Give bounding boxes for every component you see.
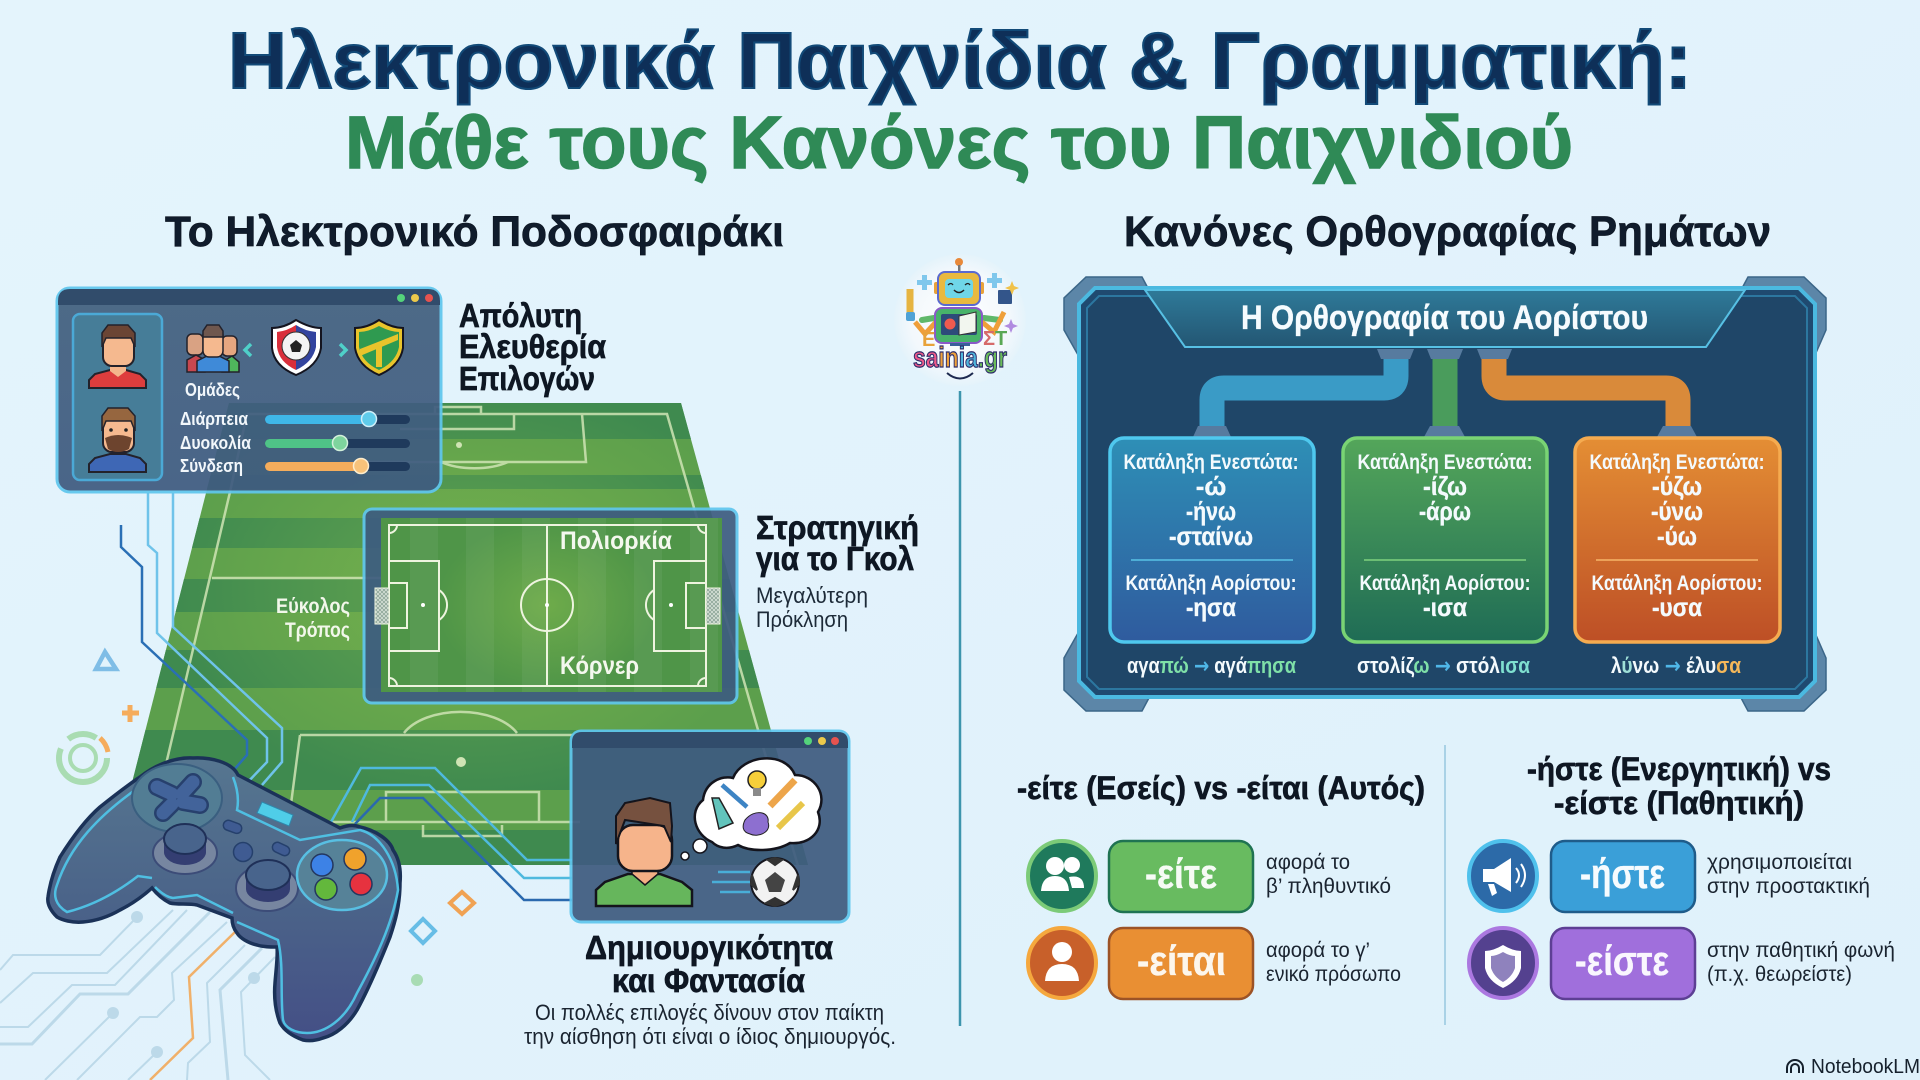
description: [1707, 939, 1895, 986]
crayon icon: [778, 803, 803, 828]
window dots: [804, 737, 839, 745]
action buttons: [297, 840, 387, 910]
text: strategy for goal: για το Γκολ: [756, 540, 914, 577]
text: strategy for goal: [756, 509, 919, 632]
logo letters: Τ: [995, 328, 1007, 350]
title: Μάθε τους Κανόνες του Παιχνιδιού: [345, 101, 1573, 184]
icon: group: [1028, 841, 1096, 911]
rule row: eite: [1028, 841, 1391, 912]
lower divider: [1444, 745, 1446, 1025]
pipe connectors: [1193, 349, 1697, 437]
logo letters: Ε: [922, 329, 935, 351]
title: Ηλεκτρονικά Παιχνίδια & Γραμματική:: [228, 16, 1692, 105]
card: green: Κατάληξη Αορίστου:: [1360, 572, 1530, 595]
slider: pass accuracy: [180, 409, 410, 429]
pencil icon: [770, 780, 795, 806]
flask icon: [712, 798, 733, 829]
icon: shield: [1469, 928, 1537, 998]
label: corner: Κόρνερ: [560, 652, 639, 680]
label: easy way: Τρόπος: [285, 619, 350, 642]
decorative shapes: [59, 652, 474, 986]
description: στην παθητική φωνή: [1707, 939, 1895, 962]
text: absolute freedom of choice: Απόλυτη: [459, 297, 582, 334]
window dots: [397, 294, 433, 302]
goal nets: [375, 588, 720, 624]
examples: στολίζω → στόλισα: [1357, 653, 1530, 679]
small controller buttons: [222, 819, 291, 862]
description: στην προστακτική: [1707, 875, 1870, 898]
controller trim: [55, 777, 398, 1033]
logo wordmark: sainia.gr: [913, 342, 1007, 374]
heading: iste vs eiste: [1527, 751, 1831, 821]
d-pad: [132, 764, 222, 832]
text: absolute freedom of choice: Επιλογών: [459, 360, 595, 397]
football field in perspective: [132, 403, 808, 865]
card: green: -άρω: [1419, 496, 1471, 526]
card: orange: -υσα: [1652, 592, 1702, 622]
label: easy way: [276, 595, 350, 642]
heading: electronic football: Το Ηλεκτρονικό Ποδοσφαιράκι: [165, 208, 784, 256]
title: [228, 16, 1692, 184]
heading: verb spelling rules: Κανόνες Ορθογραφίας Ρημάτων: [1124, 208, 1771, 256]
speed lines: [712, 872, 750, 892]
description: ενικό πρόσωπο: [1266, 963, 1401, 986]
card: orange: -ύνω: [1651, 496, 1703, 526]
panel: creativity window: [571, 731, 849, 922]
examples: λύνω → έλυσα: [1611, 653, 1741, 679]
text: creativity and imagination: Δημιουργικότητα: [585, 929, 833, 966]
pill: -ήστε: [1580, 850, 1665, 897]
description: (π.χ. θεωρείστε): [1707, 963, 1852, 986]
circuit lines: left decorations: [121, 493, 572, 900]
panel: team selection UI: [57, 288, 441, 492]
game controller: [48, 758, 400, 1041]
icon: person: [1028, 928, 1096, 998]
pill: [1109, 841, 1253, 912]
pill: [1109, 928, 1253, 999]
card: green: [1343, 438, 1547, 642]
card: blue: -σταίνω: [1169, 521, 1253, 551]
pitch markings: [389, 525, 706, 686]
text: creativity and imagination: [524, 929, 896, 1049]
chevron left: [245, 344, 251, 356]
slider: difficulty: Δυοκολία: [180, 433, 251, 453]
bulb icon: [748, 771, 766, 796]
heading: iste vs eiste: -ήστε (Ενεργητική) vs: [1527, 751, 1831, 787]
description: αφορά το γ’: [1266, 939, 1370, 962]
card: orange: [1575, 438, 1780, 642]
description: αφορά το: [1266, 851, 1350, 874]
heading: iste vs eiste: -είστε (Παθητική): [1554, 785, 1804, 821]
connector pipes: [1212, 355, 1678, 428]
card: blue: -ησα: [1186, 592, 1236, 622]
card: blue: Κατάληξη Ενεστώτα:: [1124, 451, 1298, 474]
panel: aorist spelling: [1064, 277, 1826, 711]
description: [1707, 851, 1870, 898]
label: siege: Πολιορκία: [560, 527, 673, 555]
heading: eite vs eitai: -είτε (Εσείς) vs -είται (Αυτός): [1017, 770, 1425, 806]
card: orange: Κατάληξη Αορίστου:: [1592, 572, 1762, 595]
palette icon: [743, 813, 769, 835]
card: orange: -ύω: [1657, 521, 1697, 551]
examples: αγαπώ → αγάπησα: [1127, 653, 1296, 679]
examples: [1127, 653, 1741, 679]
football: [751, 858, 799, 906]
text: absolute freedom of choice: Ελευθερία: [459, 328, 606, 365]
panel: strategy pitch: [364, 509, 737, 703]
card: blue: Κατάληξη Αορίστου:: [1126, 572, 1296, 595]
pixel avatar: [596, 798, 692, 906]
rule row: iste: [1469, 841, 1870, 912]
panel header: [1145, 290, 1745, 347]
circuit traces under controller: [0, 910, 275, 1080]
slider: connection: Σύνδεση: [180, 456, 243, 476]
pill: [1551, 928, 1695, 999]
pill: -είτε: [1145, 850, 1217, 897]
slider: pass accuracy: Διάρπεια: [180, 409, 248, 429]
rule row: eitai: [1028, 928, 1401, 999]
thought bubble: [681, 758, 821, 860]
description: χρησιμοποιείται: [1707, 851, 1852, 874]
teams icon: [187, 325, 239, 372]
slider: difficulty: [180, 433, 410, 453]
left thumbstick: [153, 824, 217, 874]
text: absolute freedom of choice: [459, 297, 606, 397]
frame corners: [1064, 277, 1826, 711]
card: blue: [1110, 438, 1314, 642]
label: teams: Ομάδες: [185, 380, 240, 400]
logo: sainia.gr robot: [894, 254, 1026, 386]
logo letters: [922, 328, 1007, 351]
panel header: Η Ορθογραφία του Αορίστου: [1241, 299, 1648, 337]
right thumbstick: [236, 860, 298, 911]
chevron right: [340, 344, 346, 356]
rule row: eiste: [1469, 928, 1895, 999]
icon: megaphone: [1469, 841, 1537, 911]
description: β’ πληθυντικό: [1266, 875, 1391, 898]
text: strategy for goal: Πρόκληση: [756, 607, 848, 632]
player avatars box: [73, 314, 162, 480]
pill: -είται: [1137, 937, 1226, 984]
center divider: [959, 391, 961, 1026]
card: green: -ίζω: [1423, 471, 1467, 501]
text: creativity and imagination: και Φαντασία: [612, 962, 805, 999]
text: creativity and imagination: Οι πολλές επιλογές δίνουν στον παίκτη: [535, 1000, 884, 1025]
text: strategy for goal: Μεγαλύτερη: [756, 583, 868, 608]
card: blue: -ώ: [1196, 471, 1226, 501]
card: orange: -ύζω: [1652, 471, 1702, 501]
logo letters: Σ: [983, 328, 995, 350]
shield: green yellow: [355, 320, 403, 375]
brush icon: [722, 785, 747, 807]
card: blue: -ήνω: [1186, 496, 1236, 526]
pill: [1551, 841, 1695, 912]
card: orange: Κατάληξη Ενεστώτα:: [1590, 451, 1764, 474]
description: [1266, 851, 1391, 898]
pill: -είστε: [1575, 937, 1669, 984]
text: creativity and imagination: την αίσθηση ότι είναι ο ίδιος δημιουργός.: [524, 1024, 896, 1049]
card: green: -ισα: [1423, 592, 1467, 622]
text: strategy for goal: Στρατηγική: [756, 509, 919, 546]
description: [1266, 939, 1401, 986]
slider: connection: [180, 456, 410, 476]
shield: red blue: [272, 320, 321, 375]
card: green: Κατάληξη Ενεστώτα:: [1358, 451, 1532, 474]
label: easy way: Εύκολος: [276, 595, 350, 618]
controller screen: [257, 802, 293, 826]
